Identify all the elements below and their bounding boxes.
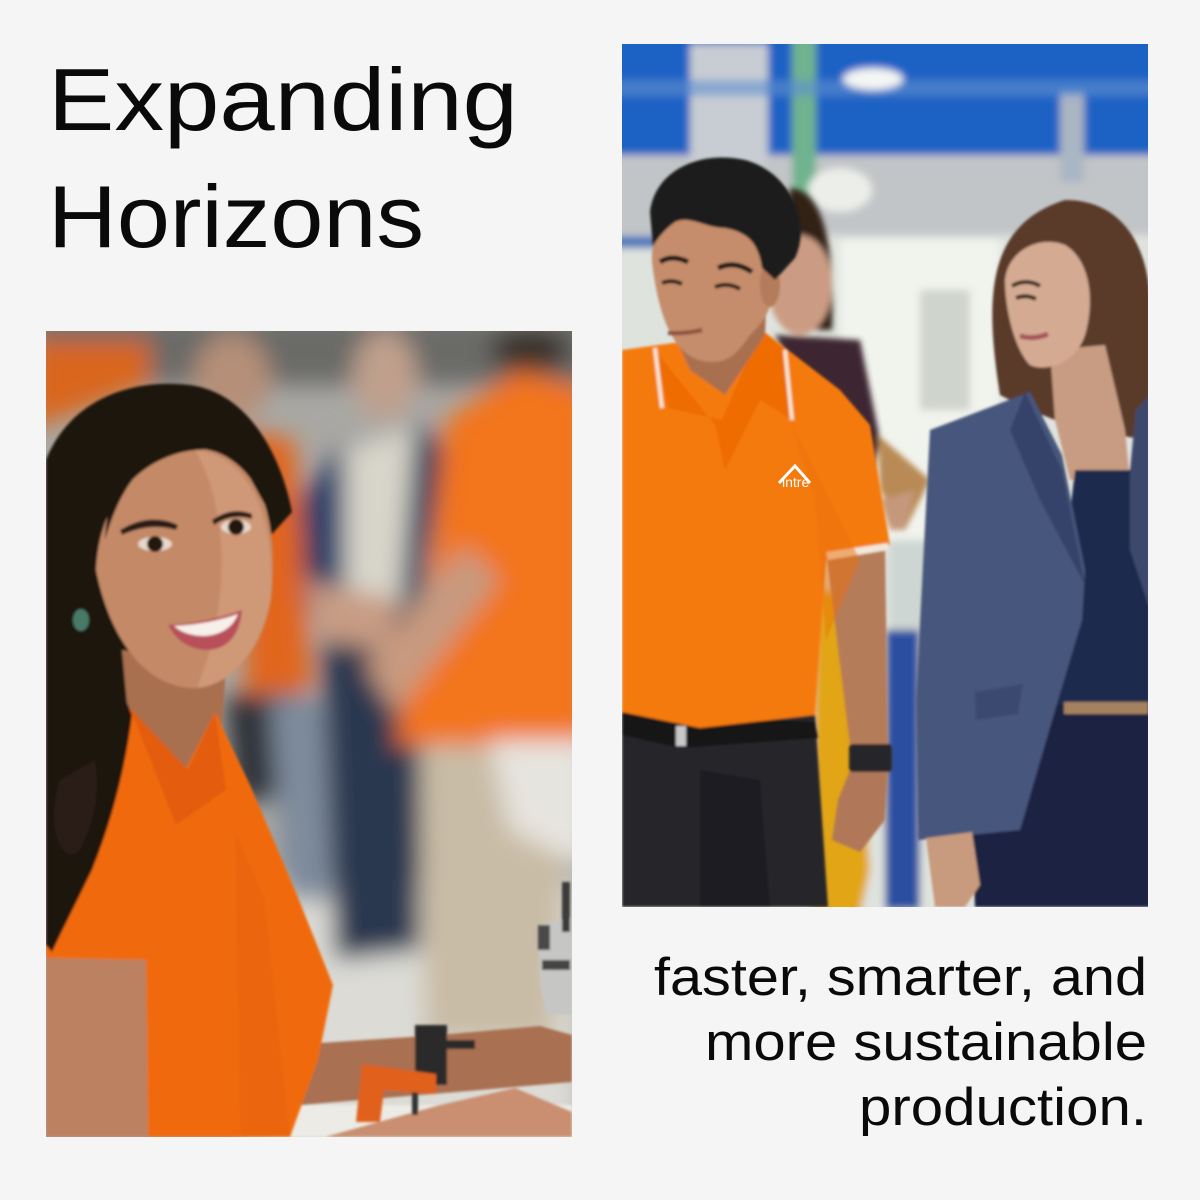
polo logo <box>779 466 810 490</box>
man: orange polo <box>622 330 890 728</box>
smile <box>168 610 242 650</box>
woman: trousers <box>972 705 1150 907</box>
man: belt <box>622 712 818 748</box>
orange polo <box>46 708 333 1137</box>
woman: face <box>1005 242 1090 367</box>
closing statement: more sustainable <box>705 1013 1147 1072</box>
title: Expanding <box>48 50 518 149</box>
woman: dark top <box>1050 470 1150 712</box>
machine arm and bracket <box>270 882 572 1137</box>
woman: blazer <box>916 392 1085 840</box>
back hair behind neck <box>46 384 292 800</box>
title <box>48 50 518 266</box>
second woman behind <box>768 188 930 530</box>
worker forearm <box>290 1026 572 1105</box>
polo logo: intre <box>782 474 809 490</box>
earring <box>73 609 89 631</box>
closing statement: production. <box>859 1078 1147 1137</box>
hair wave over the shoulder <box>46 702 134 953</box>
blurred factory background <box>30 315 590 1150</box>
woman: hair <box>992 200 1150 440</box>
brows <box>120 520 178 535</box>
face <box>96 450 273 688</box>
closing statement: faster, smarter, and <box>654 948 1147 1007</box>
blurred factory background <box>610 30 1160 915</box>
hair over forehead <box>104 447 267 539</box>
woman: hand <box>926 832 980 907</box>
neck <box>120 647 226 768</box>
man: neck and head <box>678 316 768 396</box>
man: trousers <box>622 715 828 907</box>
woman: neck and chest <box>1050 345 1130 480</box>
closing statement <box>654 948 1147 1137</box>
photo: smiling worker in orange polo <box>30 315 590 1150</box>
man: right arm <box>826 545 888 745</box>
eyes <box>138 537 172 551</box>
upper arm <box>46 958 148 1137</box>
photo: manager and executive walking in factory <box>610 30 1160 915</box>
title: Horizons <box>48 167 424 266</box>
